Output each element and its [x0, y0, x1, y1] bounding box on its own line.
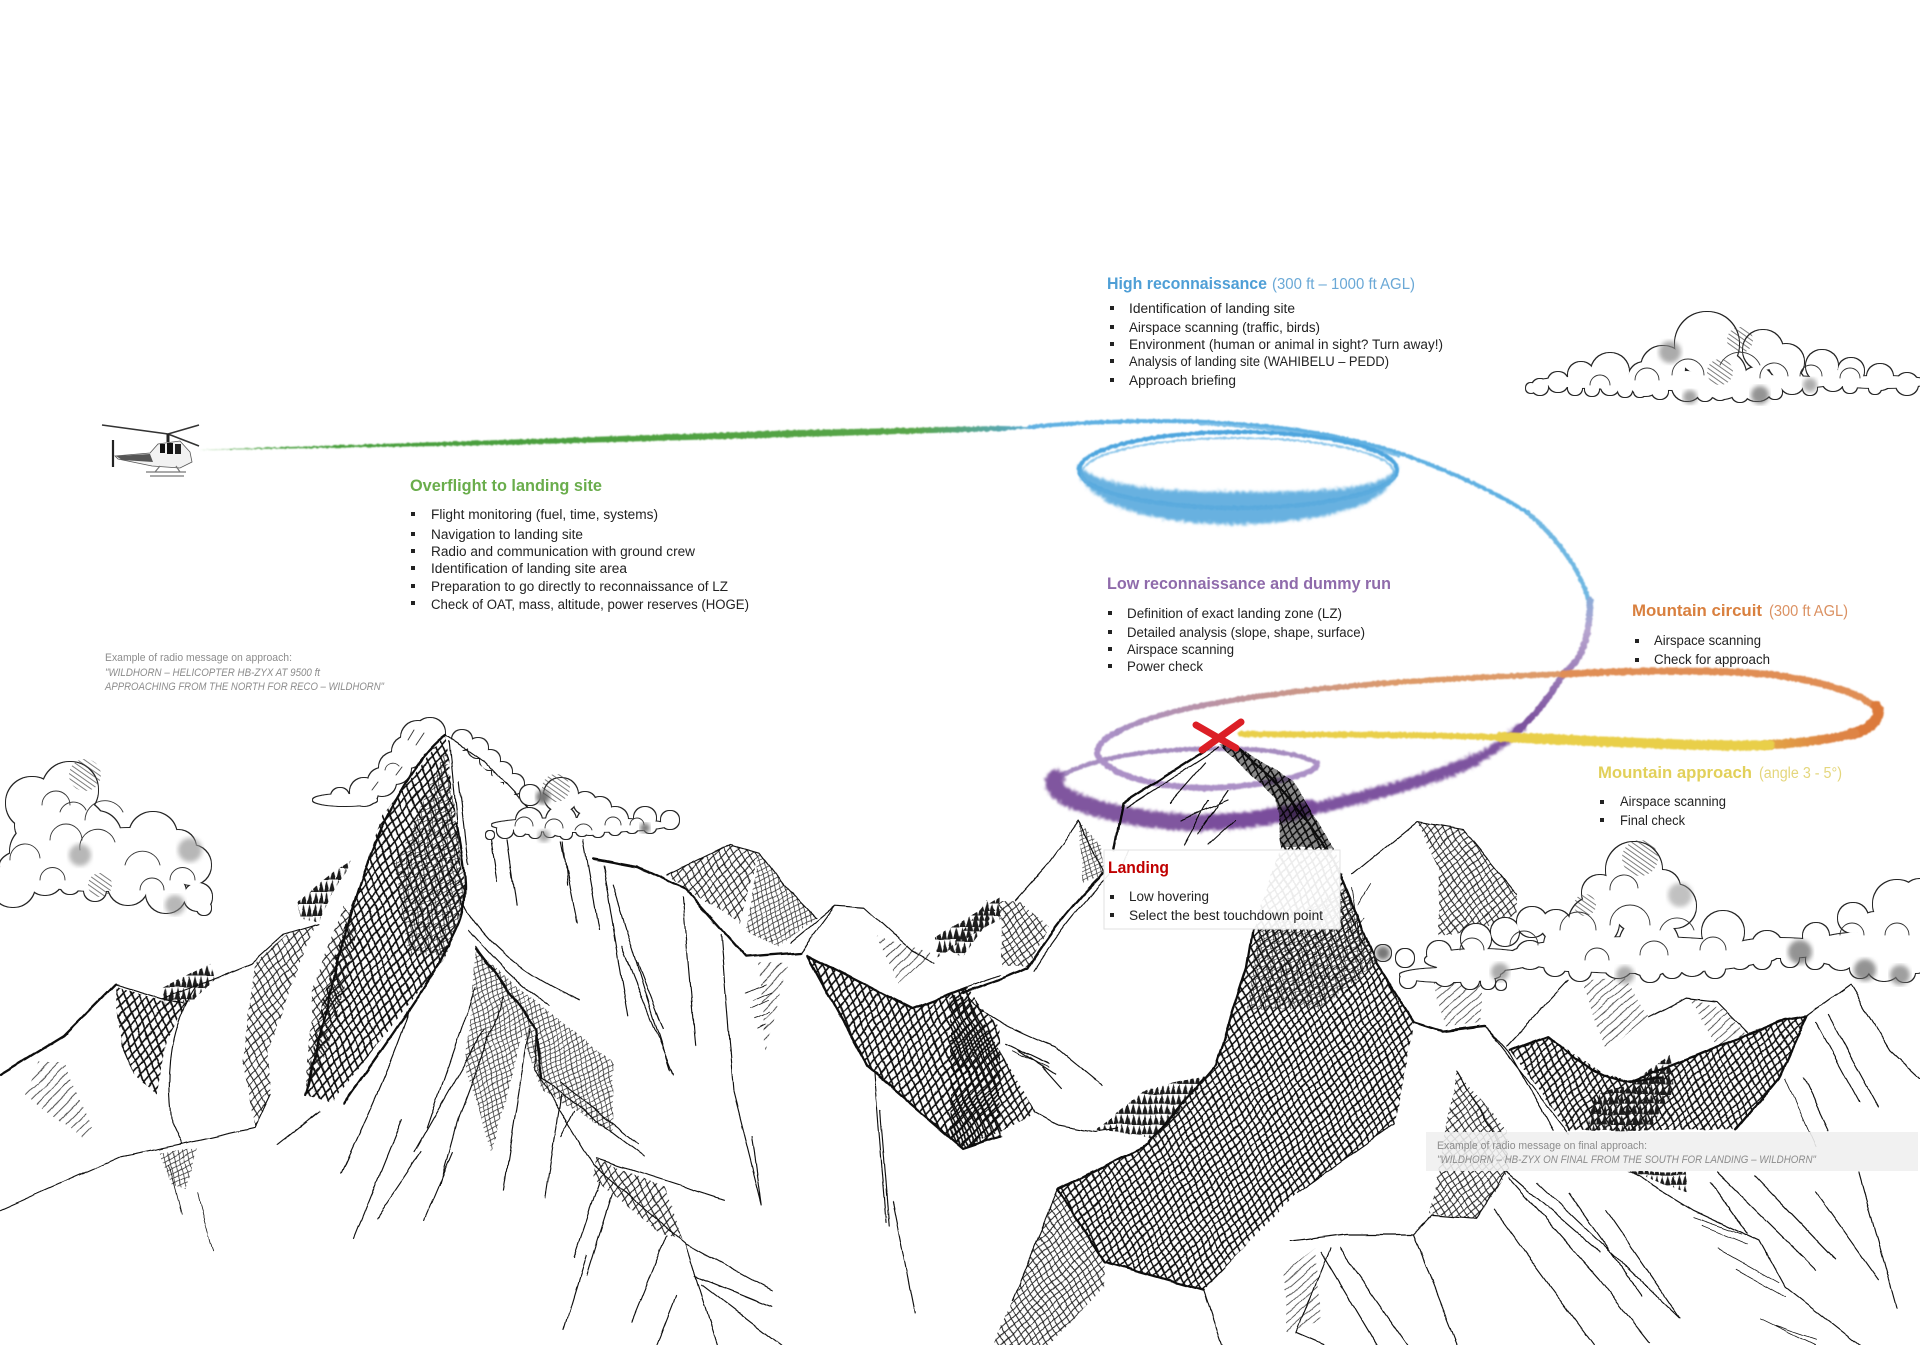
list: mountain circuit tasks: Check for approach: [1654, 652, 1770, 667]
left mountains: [0, 735, 1000, 1345]
heading: mountain approach: [1598, 764, 1842, 782]
cloud right of main peak: [486, 774, 679, 842]
heading: high reconnaissance: High reconnaissance: [1107, 275, 1267, 293]
cloud top right: [1526, 312, 1920, 404]
list: overflight tasks: Identification of landing site area: [431, 561, 627, 576]
list: overflight tasks: Radio and communication with ground crew: [431, 544, 695, 559]
heading: mountain circuit: (300 ft AGL): [1769, 603, 1848, 620]
heading: landing: Landing: [1108, 859, 1169, 877]
radio message text: [1437, 1140, 1817, 1166]
heading: mountain circuit: [1632, 602, 1848, 620]
heading: mountain approach: (angle 3 - 5°): [1759, 765, 1842, 782]
radio message text: Example of radio message on final approach:: [1437, 1140, 1647, 1152]
flight path trajectory: [199, 421, 1878, 823]
heading: high reconnaissance: (300 ft – 1000 ft AGL): [1272, 276, 1415, 293]
heading: mountain circuit: Mountain circuit: [1632, 602, 1763, 620]
mountain range sketch: [0, 735, 1920, 1345]
overflight segment: [199, 426, 1040, 450]
heading: mountain approach: Mountain approach: [1598, 764, 1752, 782]
list: high reconnaissance tasks: Airspace scanning (traffic, birds): [1129, 320, 1320, 335]
panel: landing: [1104, 850, 1340, 929]
landing peak left ridge: [1114, 745, 1235, 870]
radio message text: "WILDHORN – HB-ZYX ON FINAL FROM THE SOUTH FOR LANDING – WILDHORN": [1437, 1154, 1817, 1166]
list: low reconnaissance tasks: [1108, 606, 1365, 674]
panel: overflight to landing site: [410, 477, 749, 612]
list: low reconnaissance tasks: Definition of exact landing zone (LZ): [1127, 606, 1342, 621]
list: high reconnaissance tasks: Identification of landing site: [1129, 301, 1295, 316]
list: overflight tasks: [411, 507, 749, 612]
icon: helicopter: [102, 425, 199, 476]
list: mountain circuit tasks: Airspace scanning: [1654, 633, 1761, 648]
heading: low reconnaissance: Low reconnaissance and dummy run: [1107, 575, 1391, 593]
heading: overflight: Overflight to landing site: [410, 477, 602, 495]
panel: mountain approach: [1598, 764, 1842, 828]
heading: high reconnaissance: [1107, 275, 1415, 293]
list: low reconnaissance tasks: Detailed analysis (slope, shape, surface): [1127, 625, 1365, 640]
panel: high reconnaissance: [1107, 275, 1443, 388]
list: low reconnaissance tasks: Power check: [1127, 659, 1203, 674]
panel: radio message on approach: APPROACHING FROM THE NORTH FOR RECO – WILDHORN": [104, 681, 385, 693]
trees on right slopes: [950, 901, 1689, 1193]
mountain approach: [1241, 734, 1770, 745]
list: overflight tasks: Preparation to go directly to reconnaissance of LZ: [431, 579, 728, 594]
panel: radio message on approach: "WILDHORN – HELICOPTER HB-ZYX AT 9500 ft: [105, 667, 321, 679]
cloud behind main peak: [313, 718, 524, 806]
list: mountain approach tasks: Airspace scanning: [1620, 794, 1726, 809]
list: mountain approach tasks: [1600, 794, 1726, 828]
cloud in front of right mountains: [1375, 840, 1920, 990]
list: overflight tasks: Check of OAT, mass, altitude, power reserves (HOGE): [431, 597, 749, 612]
cloud far left: [0, 759, 212, 915]
list: mountain approach tasks: Final check: [1620, 813, 1685, 828]
mountain circuit: [1117, 671, 1878, 745]
list: overflight tasks: Flight monitoring (fuel, time, systems): [431, 507, 658, 522]
panel: mountain circuit: [1632, 602, 1848, 667]
list: landing tasks: Low hovering: [1129, 889, 1209, 904]
left mountain line work: [0, 735, 1000, 1345]
list: overflight tasks: Navigation to landing site: [431, 527, 583, 542]
panel: radio message on approach: Example of radio message on approach:: [105, 652, 292, 664]
low reconnaissance spiral: [1053, 513, 1590, 823]
list: high reconnaissance tasks: Approach briefing: [1129, 373, 1236, 388]
high reconnaissance loop: [1030, 421, 1528, 524]
right mountains and landing peak: [950, 745, 1920, 1345]
trees on left slopes: [163, 860, 1000, 1004]
panel: radio message on approach: [104, 652, 385, 693]
list: high reconnaissance tasks: [1110, 301, 1443, 388]
right mountain line work: [962, 745, 1920, 1345]
list: high reconnaissance tasks: Environment (human or animal in sight? Turn away!): [1129, 337, 1443, 352]
list: low reconnaissance tasks: Airspace scanning: [1127, 642, 1234, 657]
panel: radio message on final approach: [1426, 1132, 1918, 1171]
list: landing tasks: [1110, 889, 1323, 923]
list: mountain circuit tasks: [1635, 633, 1770, 667]
icon: red landing X: [1196, 722, 1241, 750]
panel: low reconnaissance and dummy run: [1107, 575, 1391, 674]
list: landing tasks: Select the best touchdown point: [1129, 908, 1323, 923]
list: high reconnaissance tasks: Analysis of landing site (WAHIBELU – PEDD): [1129, 354, 1389, 369]
